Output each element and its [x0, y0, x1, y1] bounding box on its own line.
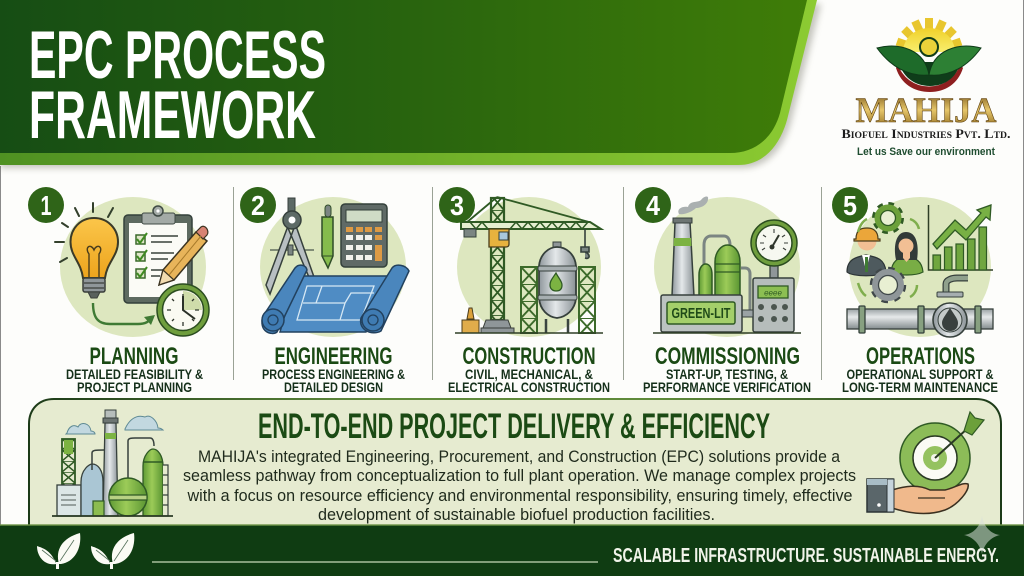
body text: development of sustainable biofuel production facilities. [318, 505, 715, 524]
icon: leaf sprouts [37, 533, 134, 569]
description: planning [66, 367, 203, 395]
badge 4 [635, 187, 671, 223]
heading: engineering: ENGINEERING [274, 343, 392, 370]
badge 2: 2 [251, 190, 265, 221]
heading: planning: PLANNING [90, 343, 178, 370]
panel: engineering [240, 187, 409, 395]
panel: operations [832, 187, 998, 395]
logo tagline: Let us Save our environment [857, 146, 995, 158]
description: engineering: PROCESS ENGINEERING & [262, 367, 405, 382]
icon: green pen [322, 205, 333, 268]
arrow: bulb to clock [93, 303, 155, 325]
description: planning: DETAILED FEASIBILITY & [66, 367, 203, 382]
clouds [66, 424, 95, 434]
badge 3: 3 [450, 190, 464, 221]
badge 2 [240, 187, 276, 223]
icon: storage tank [538, 242, 577, 333]
heading: commissioning: COMMISSIONING [655, 343, 800, 370]
badge 5: 5 [843, 190, 857, 221]
panel: end-to-end delivery [29, 399, 1001, 530]
icon: process tanks [699, 236, 750, 314]
icon: green-lit status box: GREEN-LIT [672, 306, 731, 322]
icon: pipeline and valve [847, 278, 993, 337]
badge 4: 4 [646, 190, 660, 221]
icon: clock [157, 284, 209, 336]
badge 5 [832, 187, 868, 223]
description: construction [448, 367, 610, 395]
header banner [0, 0, 821, 168]
icon: tower crane [461, 197, 601, 333]
description: commissioning: START-UP, TESTING, & [666, 367, 788, 382]
icon: control panel [742, 278, 794, 332]
divider lines [234, 187, 822, 380]
description: engineering [262, 367, 405, 395]
icon: refinery [52, 410, 173, 516]
logo sun rays [897, 18, 961, 46]
icon: calculator [341, 204, 387, 267]
title [29, 17, 326, 153]
icon: growth chart [928, 205, 993, 270]
body text: MAHIJA's integrated Engineering, Procurement, and Construction (EPC) solutions provide a [198, 447, 840, 466]
icon: green-lit status box [661, 295, 742, 332]
description: planning: PROJECT PLANNING [77, 380, 192, 395]
logo company name: Biofuel Industries Pvt. Ltd. [842, 126, 1010, 141]
icon: control panel: eeee [764, 288, 782, 298]
title: FRAMEWORK [29, 77, 316, 153]
description: engineering: DETAILED DESIGN [284, 380, 383, 395]
logo leaves [877, 46, 929, 75]
description: operations [842, 367, 998, 395]
description: construction: CIVIL, MECHANICAL, & [465, 367, 593, 382]
icon: light bulb [55, 203, 118, 298]
icon: green gear [875, 205, 901, 231]
description: construction: ELECTRICAL CONSTRUCTION [448, 380, 610, 395]
description: commissioning: PERFORMANCE VERIFICATION [643, 380, 811, 395]
logo: Mahija Biofuel Industries [842, 18, 1010, 158]
icon: clipboard checklist [124, 206, 192, 303]
body text [183, 447, 856, 524]
icon: target in hand [867, 412, 984, 514]
panel: planning [28, 187, 209, 395]
heading: construction: CONSTRUCTION [462, 343, 596, 370]
body text: seamless pathway from conceptualization to full plant operation. We manage complex projects [183, 466, 856, 485]
icon: drafting compass [266, 198, 320, 296]
badge 1 [28, 187, 64, 223]
description: operations: LONG-TERM MAINTENANCE [842, 380, 998, 395]
description: operations: OPERATIONAL SUPPORT & [846, 367, 994, 382]
icon: smoke [678, 196, 708, 214]
panel: commissioning [635, 187, 811, 395]
panel: construction [439, 187, 610, 395]
sparkle mark [964, 516, 1000, 554]
icon: grey gear [873, 270, 903, 300]
icon: pencil [159, 226, 208, 285]
badge 3 [439, 187, 475, 223]
title: EPC PROCESS [29, 17, 326, 93]
logo wordmark: MAHIJA [856, 90, 996, 130]
footer bar [0, 516, 1024, 576]
icon: cycle arrows [858, 219, 919, 297]
icon: yellow machine [462, 308, 479, 333]
heading: operations: OPERATIONS [866, 343, 975, 370]
badge 1: 1 [40, 190, 52, 221]
body text: with a focus on resource efficiency and environmental responsibility, ensuring timely, effective [187, 486, 852, 505]
icon: blueprint roll [262, 265, 409, 333]
footer rule [152, 561, 598, 563]
icon: scaffolding [521, 267, 595, 333]
icon: pressure gauge [751, 220, 797, 278]
icon: chimney [672, 218, 694, 296]
description: commissioning [643, 367, 811, 395]
icon: engineer and manager [847, 228, 923, 276]
